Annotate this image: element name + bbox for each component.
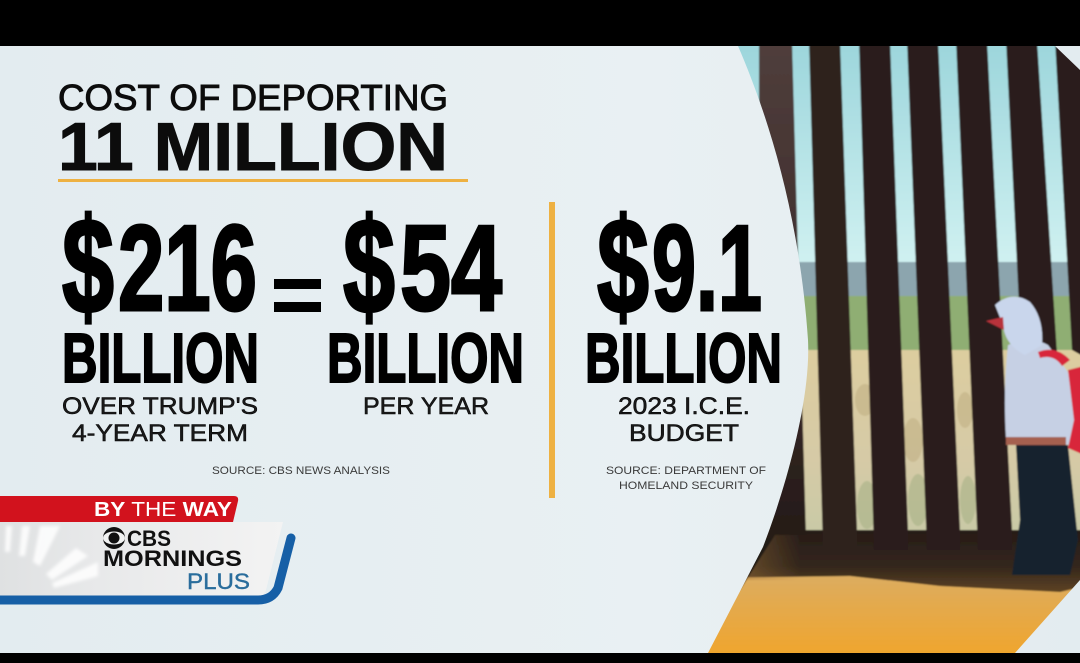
top black bar — [0, 0, 1080, 46]
migrant figure — [986, 297, 1080, 575]
logo: By the Way CBS Mornings Plus: BY THE WAY — [94, 499, 233, 521]
stat: $216 billion — [62, 190, 259, 447]
stat: $54 billion per year: BILLION — [327, 319, 524, 397]
stat: $54 billion per year — [327, 190, 524, 420]
logo: By the Way CBS Mornings Plus: MORNINGS — [103, 546, 242, 571]
stat: $9.1 billion ICE budget: $ — [597, 190, 649, 342]
title — [58, 77, 448, 185]
stat: $216 billion: BILLION — [62, 319, 259, 397]
vertical divider — [549, 202, 555, 498]
logo white panel — [0, 522, 283, 598]
stat: $9.1 billion ICE budget — [585, 190, 782, 447]
fence bars — [740, 46, 1080, 590]
logo fan graphic — [5, 526, 98, 588]
source: DHS — [606, 465, 766, 492]
source: DHS: SOURCE: DEPARTMENT OF — [606, 465, 766, 477]
logo: By the Way CBS Mornings Plus: PLUS — [187, 569, 250, 594]
logo: By the Way CBS Mornings Plus: CBS — [127, 526, 171, 551]
stat: $54 billion per year: $ — [343, 190, 395, 342]
source: DHS: HOMELAND SECURITY — [619, 480, 754, 492]
stat: $9.1 billion ICE budget: BILLION — [585, 319, 782, 397]
stat: $54 billion per year: 54 — [400, 200, 502, 336]
logo: By the Way CBS Mornings Plus — [0, 496, 291, 600]
stat: $9.1 billion ICE budget: 9.1 — [652, 200, 762, 336]
stat: $216 billion: OVER TRUMP'S — [62, 393, 258, 420]
logo blue swoosh — [0, 538, 291, 600]
equals sign — [274, 279, 321, 312]
logo red banner — [0, 496, 238, 522]
source: CBS: SOURCE: CBS NEWS ANALYSIS — [212, 465, 390, 477]
CBS eye — [103, 527, 125, 549]
stat: $216 billion: 216 — [118, 200, 257, 336]
title: 11 MILLION — [58, 109, 448, 185]
stat: $54 billion per year: PER YEAR — [363, 393, 489, 420]
title underline — [58, 179, 468, 182]
bottom black bar — [0, 653, 1080, 663]
stat: $9.1 billion ICE budget: 2023 I.C.E. — [618, 393, 750, 420]
stat: $216 billion: 4-YEAR TERM — [72, 420, 248, 447]
photo: border fence and migrant — [700, 40, 1080, 660]
title: COST OF DEPORTING — [58, 77, 448, 118]
stat: $9.1 billion ICE budget: BUDGET — [629, 420, 739, 447]
stat: $216 billion: $ — [62, 190, 114, 342]
